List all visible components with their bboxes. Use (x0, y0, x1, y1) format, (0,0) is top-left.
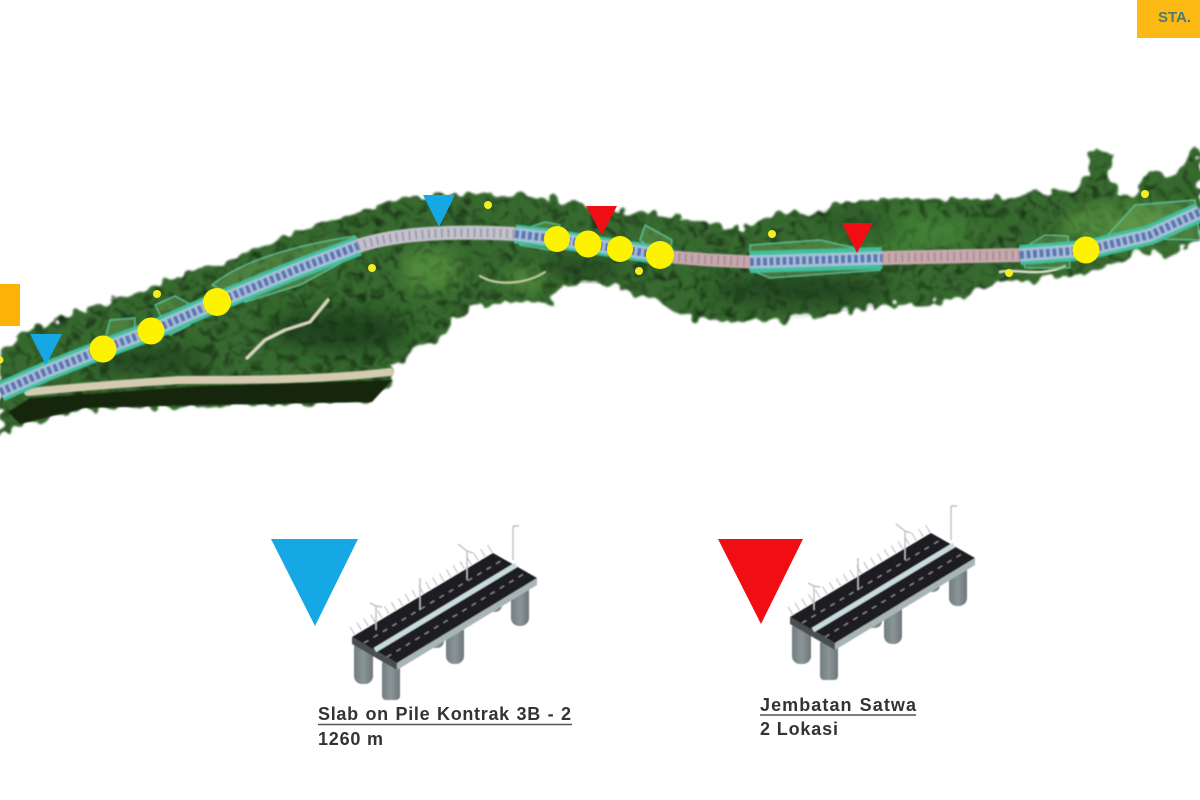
legend: slab on pile caption: Slab on Pile Kontrak 3B - 2 (318, 704, 571, 724)
legend: slab on pile caption (318, 704, 572, 749)
aerial map strip: forest terrain (0, 148, 1200, 436)
yellow markers: large (90, 226, 1100, 362)
map marker: blue triangle west (30, 334, 62, 365)
label box: STA (top right) (1137, 0, 1200, 38)
corridor outlines (105, 200, 1200, 340)
dark forest shadows (90, 215, 900, 372)
legend: slab on pile caption: 1260 m (318, 729, 383, 749)
dark lower slope (8, 380, 392, 424)
pink track (672, 257, 750, 262)
legend: wildlife bridge icon (790, 506, 975, 680)
legend: wildlife bridge caption: 2 Lokasi (760, 719, 838, 739)
corridor halo: central section (515, 234, 672, 257)
legend: slab on pile triangle (271, 539, 358, 626)
label box: left edge marker (0, 284, 20, 326)
corridor halo: east sections (750, 258, 882, 262)
legend: wildlife bridge caption: Jembatan Satwa (760, 695, 917, 715)
blue track (0, 212, 1200, 392)
legend: wildlife bridge caption (760, 695, 917, 739)
corridor halo: west section (0, 246, 358, 392)
legend: wildlife bridge triangle (718, 539, 803, 624)
lighter vegetation patches (90, 203, 1180, 372)
grey track (358, 233, 515, 246)
label box: STA (top right): STA. (1158, 9, 1191, 26)
map marker: red triangle central (586, 206, 617, 235)
yellow markers: small (0, 190, 1149, 364)
map marker: red triangle east (842, 223, 873, 253)
legend: slab on pile bridge icon (352, 526, 537, 700)
map marker: blue triangle central (423, 195, 455, 227)
alignment: rail track with corridors (0, 200, 1200, 392)
excavated road and scars (28, 266, 1065, 392)
